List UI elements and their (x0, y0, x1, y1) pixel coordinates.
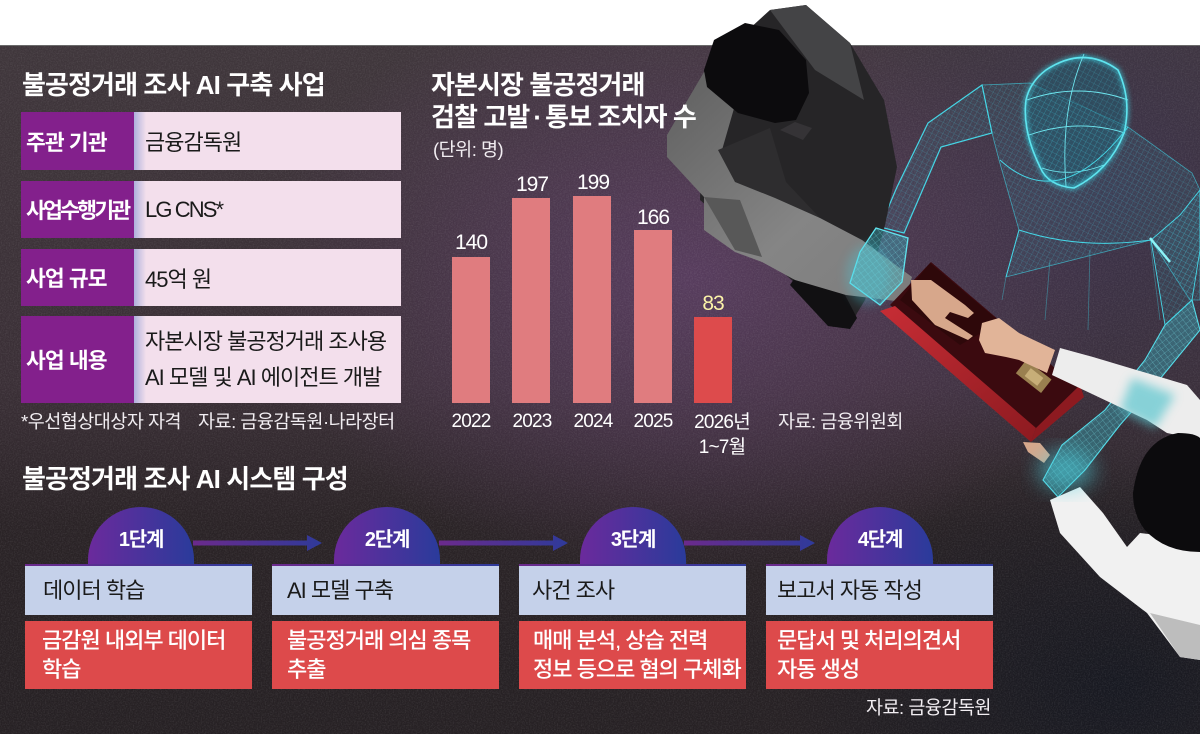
row label: size: 사업 규모 (26, 267, 107, 291)
top stripe 4 (766, 564, 993, 566)
white top strip (0, 0, 660, 45)
stage 3 detail: 매매 분석, 상습 전력 (533, 628, 707, 653)
row value: content: 자본시장 불공정거래 조사용 (145, 328, 386, 354)
row value: size (134, 249, 401, 306)
stage 2 detail: 불공정거래 의심 종목 (287, 628, 470, 653)
stage 4 detail: 문답서 및 처리의견서 (777, 628, 960, 653)
row value: content: AI 모델 및 AI 에이전트 개발 (145, 364, 381, 390)
arrow: stage 2 to 3 (439, 535, 568, 551)
value 197: 197 (516, 173, 548, 196)
top stripe 3 (519, 564, 746, 566)
text: unit: (단위: 명) (433, 139, 503, 160)
stage 1 detail: 금감원 내외부 데이터 (42, 628, 225, 653)
heading: project table: 불공정거래 조사 AI 구축 사업 (22, 70, 325, 100)
text: chart source: 자료: 금융위원회 (778, 411, 903, 432)
row value: lead agency (134, 112, 401, 170)
bar 2025 (634, 230, 672, 403)
label: stage 3: 3단계 (611, 529, 655, 551)
icon: robot hand over sleeve (846, 228, 908, 305)
stage 3 detail: 정보 등으로 혐의 구체화 (533, 657, 741, 682)
value 83: 83 (702, 292, 724, 315)
icon: hands over the case (911, 280, 1055, 463)
year 2024: 2024 (573, 411, 613, 432)
year 2026: 1~7월 (699, 437, 745, 458)
icon: red briefcase (880, 262, 1084, 442)
label: stage 2: 2단계 (365, 529, 409, 551)
year 2026 (694, 412, 750, 458)
heading: system composition: 불공정거래 조사 AI 시스템 구성 (22, 464, 348, 494)
top stripe 1 (25, 564, 252, 566)
row label: content (21, 316, 134, 403)
stage 1 detail: 학습 (42, 657, 80, 682)
value 199: 199 (577, 171, 609, 194)
row value: content (134, 316, 401, 403)
heading: chart title: 자본시장 불공정거래 (431, 70, 645, 100)
stage 2 badge (334, 507, 440, 565)
stage 4 title: 보고서 자동 작성 (777, 578, 922, 603)
stage 4 detail: 자동 생성 (777, 657, 859, 682)
bar 2024 (573, 196, 611, 403)
footnote and source: *우선협상대상자 자격 자료: 금융감독원·나라장터 (21, 411, 395, 432)
bar 2026 (694, 317, 732, 403)
value 166: 166 (637, 206, 669, 229)
stage 2 title: AI 모델 구축 (287, 578, 393, 603)
stage 4 badge (827, 507, 933, 565)
stage 1 title: 데이터 학습 (43, 578, 144, 603)
stage 4 detail (766, 621, 993, 689)
bar 2023 (512, 198, 550, 403)
stage 3 title (519, 566, 746, 615)
stage 3 detail (519, 621, 746, 689)
row label: lead agency: 주관 기관 (26, 130, 107, 154)
process: four stage flow (25, 507, 993, 689)
heading: chart title: 검찰 고발·통보 조치자 수 (431, 102, 696, 132)
value 140: 140 (455, 231, 487, 254)
row value: lead agency: 금융감독원 (145, 130, 241, 155)
year 2022: 2022 (451, 411, 491, 432)
arrow: stage 3 to 4 (684, 535, 815, 551)
label: stage 1: 1단계 (119, 529, 163, 551)
row label: contractor (21, 181, 134, 238)
year 2026: 2026년 (694, 412, 750, 433)
row value: size: 45억 원 (145, 266, 211, 292)
stage 2 detail: 추출 (287, 657, 325, 682)
icon: man in grey jacket seen from above (667, 5, 912, 329)
year 2023: 2023 (512, 411, 552, 432)
row value: contractor: LG CNS* (145, 196, 222, 222)
row label: size (21, 249, 134, 306)
stage 2 title (272, 566, 499, 615)
stage 3 title: 사건 조사 (532, 578, 614, 603)
stage 1 title (25, 566, 252, 615)
row label: lead agency (21, 112, 134, 170)
stage 4 title (766, 566, 993, 615)
stage 1 detail (25, 621, 252, 689)
row label: content: 사업 내용 (26, 349, 107, 373)
label: stage 4: 4단계 (858, 529, 902, 551)
bar chart: persons referred by year (451, 171, 750, 458)
bar 2022 (452, 257, 490, 403)
panel: AI project overview (21, 70, 401, 432)
top stripe 2 (272, 564, 499, 566)
row label: contractor: 사업수행기관 (26, 199, 128, 223)
year 2025: 2025 (633, 411, 673, 432)
stage 2 detail (272, 621, 499, 689)
row value: contractor (134, 181, 401, 238)
arrow: stage 1 to 2 (193, 535, 322, 551)
text: system source: 자료: 금융감독원 (866, 697, 991, 718)
stage 3 badge (580, 507, 686, 565)
icon: person in white shirt (1038, 348, 1200, 660)
icon: AI wireframe figure (880, 53, 1200, 497)
stage 1 badge (88, 507, 194, 565)
heading: chart title (431, 70, 696, 132)
